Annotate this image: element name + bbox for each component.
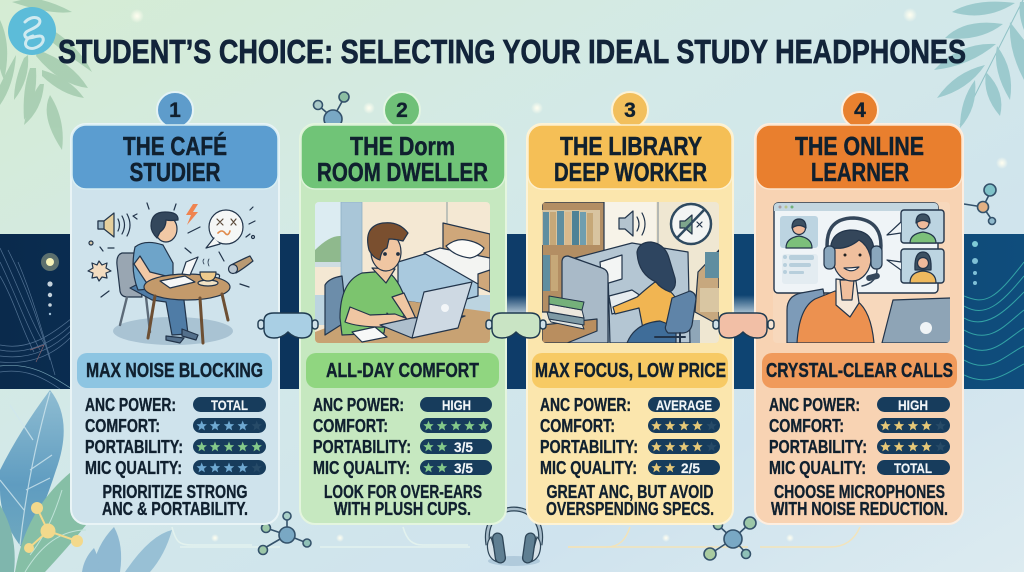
card 3 advice: GREAT ANC, BUT AVOID <box>546 482 714 502</box>
card 4 header <box>756 125 962 189</box>
card 2 ratings: HIGH <box>442 398 471 413</box>
card 1 number badge: 1 <box>169 99 181 122</box>
card 2 priority pill <box>306 353 499 388</box>
card 4 ratings: HIGH <box>898 398 928 413</box>
card 2 ratings: ANC POWER: <box>313 395 404 415</box>
card 1 ratings: MIC QUALITY: <box>85 458 182 478</box>
icon: headphones <box>487 509 541 566</box>
card 2 priority pill: ALL-DAY COMFORT <box>326 360 479 382</box>
card 1 header <box>72 125 278 189</box>
card 3 advice <box>546 482 714 519</box>
card 4 priority pill <box>762 353 957 388</box>
card 3 ratings: PORTABILITY: <box>540 437 638 457</box>
logo badge <box>8 7 56 55</box>
card 3 header: DEEP WORKER <box>554 157 707 187</box>
card 4 header: THE ONLINE <box>795 131 924 161</box>
card 1 advice: ANC & PORTABILITY. <box>102 499 248 519</box>
card 1 header: THE CAFÉ <box>123 131 227 161</box>
illustration: student in library carrel <box>542 202 719 343</box>
card 3 number badge <box>612 92 648 128</box>
card 4 ratings: MIC QUALITY: <box>769 458 866 478</box>
panel: the dorm room dweller <box>300 92 506 524</box>
card 2 advice: WITH PLUSH CUPS. <box>334 499 471 519</box>
card 3 ratings: MIC QUALITY: <box>540 458 637 478</box>
molecule icon: bottom right <box>704 517 756 560</box>
leaves: top left <box>0 0 92 150</box>
card 4 advice: CHOOSE MICROPHONES <box>774 482 945 502</box>
card 3 priority pill: MAX FOCUS, LOW PRICE <box>535 360 726 382</box>
illustration: online learner on video call <box>773 202 951 343</box>
card 3 ratings <box>540 395 720 478</box>
card 3 header <box>528 125 732 189</box>
card 2 body <box>300 124 506 524</box>
card 4 body <box>755 124 963 524</box>
card 4 ratings: TOTAL <box>894 461 932 476</box>
card 3 ratings: ANC POWER: <box>540 395 631 415</box>
card 4 ratings <box>769 395 950 478</box>
molecule icon: bottom left <box>258 512 311 554</box>
connector: peach eye mask <box>713 313 774 338</box>
card 2 ratings: PORTABILITY: <box>313 437 411 457</box>
leaves: bottom left <box>0 390 172 572</box>
card 4 advice: WITH NOISE REDUCTION. <box>771 499 948 519</box>
card 1 priority pill: MAX NOISE BLOCKING <box>86 360 263 382</box>
connector: green eye mask <box>486 313 546 338</box>
card 1 ratings: COMFORT: <box>85 416 160 436</box>
card 4 number badge: 4 <box>854 99 866 122</box>
card 3 body <box>527 124 733 524</box>
card 2 number badge: 2 <box>396 99 408 122</box>
card 1 ratings: ANC POWER: <box>85 395 176 415</box>
card 3 number badge: 3 <box>624 99 636 122</box>
card 4 ratings: PORTABILITY: <box>769 437 867 457</box>
card 3 ratings: AVERAGE <box>656 398 712 413</box>
panel: the library deep worker <box>527 92 733 524</box>
card 1 advice: PRIORITIZE STRONG <box>102 482 248 502</box>
card 4 number badge <box>842 92 878 128</box>
molecule icon: right <box>964 184 996 224</box>
card 2 ratings: 3/5 <box>454 461 473 476</box>
card 2 header <box>301 125 505 189</box>
leaves: top right <box>934 0 1024 128</box>
card 2 ratings: MIC QUALITY: <box>313 458 410 478</box>
card 2 advice: LOOK FOR OVER-EARS <box>324 482 482 502</box>
molecule icon: top <box>314 92 349 128</box>
card 3 advice: OVERSPENDING SPECS. <box>546 499 714 519</box>
card 3 header: THE LIBRARY <box>560 131 702 161</box>
card 1 ratings <box>85 395 266 478</box>
card 4 ratings: ANC POWER: <box>769 395 860 415</box>
card 1 advice <box>102 482 248 519</box>
card 3 ratings: COMFORT: <box>540 416 615 436</box>
card 2 header: ROOM DWELLER <box>317 157 488 187</box>
card 4 ratings: COMFORT: <box>769 416 844 436</box>
illustration: student in dorm room <box>315 202 490 343</box>
card 1 header: STUDIER <box>130 157 221 187</box>
card 3 ratings: 2/5 <box>681 461 700 476</box>
illustration: noisy cafe student <box>88 203 255 345</box>
connector: blue eye mask <box>258 313 318 338</box>
panel: the cafe studier <box>71 92 279 524</box>
card 2 ratings <box>313 395 492 478</box>
card 1 number badge <box>157 92 193 128</box>
card 4 header: LEARNER <box>811 157 909 187</box>
card 1 ratings: PORTABILITY: <box>85 437 183 457</box>
card 4 advice <box>771 482 948 519</box>
card 4 priority pill: CRYSTAL-CLEAR CALLS <box>766 360 953 382</box>
card 1 priority pill <box>77 353 272 388</box>
card 2 ratings: 3/5 <box>454 440 473 455</box>
card 1 ratings: TOTAL <box>211 398 248 413</box>
card 2 number badge <box>384 92 420 128</box>
card 1 body <box>71 124 279 524</box>
card 2 advice <box>324 482 482 519</box>
panel: the online learner <box>755 92 963 524</box>
card 2 header: THE Dorm <box>350 131 455 161</box>
card 3 priority pill <box>532 353 728 388</box>
card 2 ratings: COMFORT: <box>313 416 388 436</box>
